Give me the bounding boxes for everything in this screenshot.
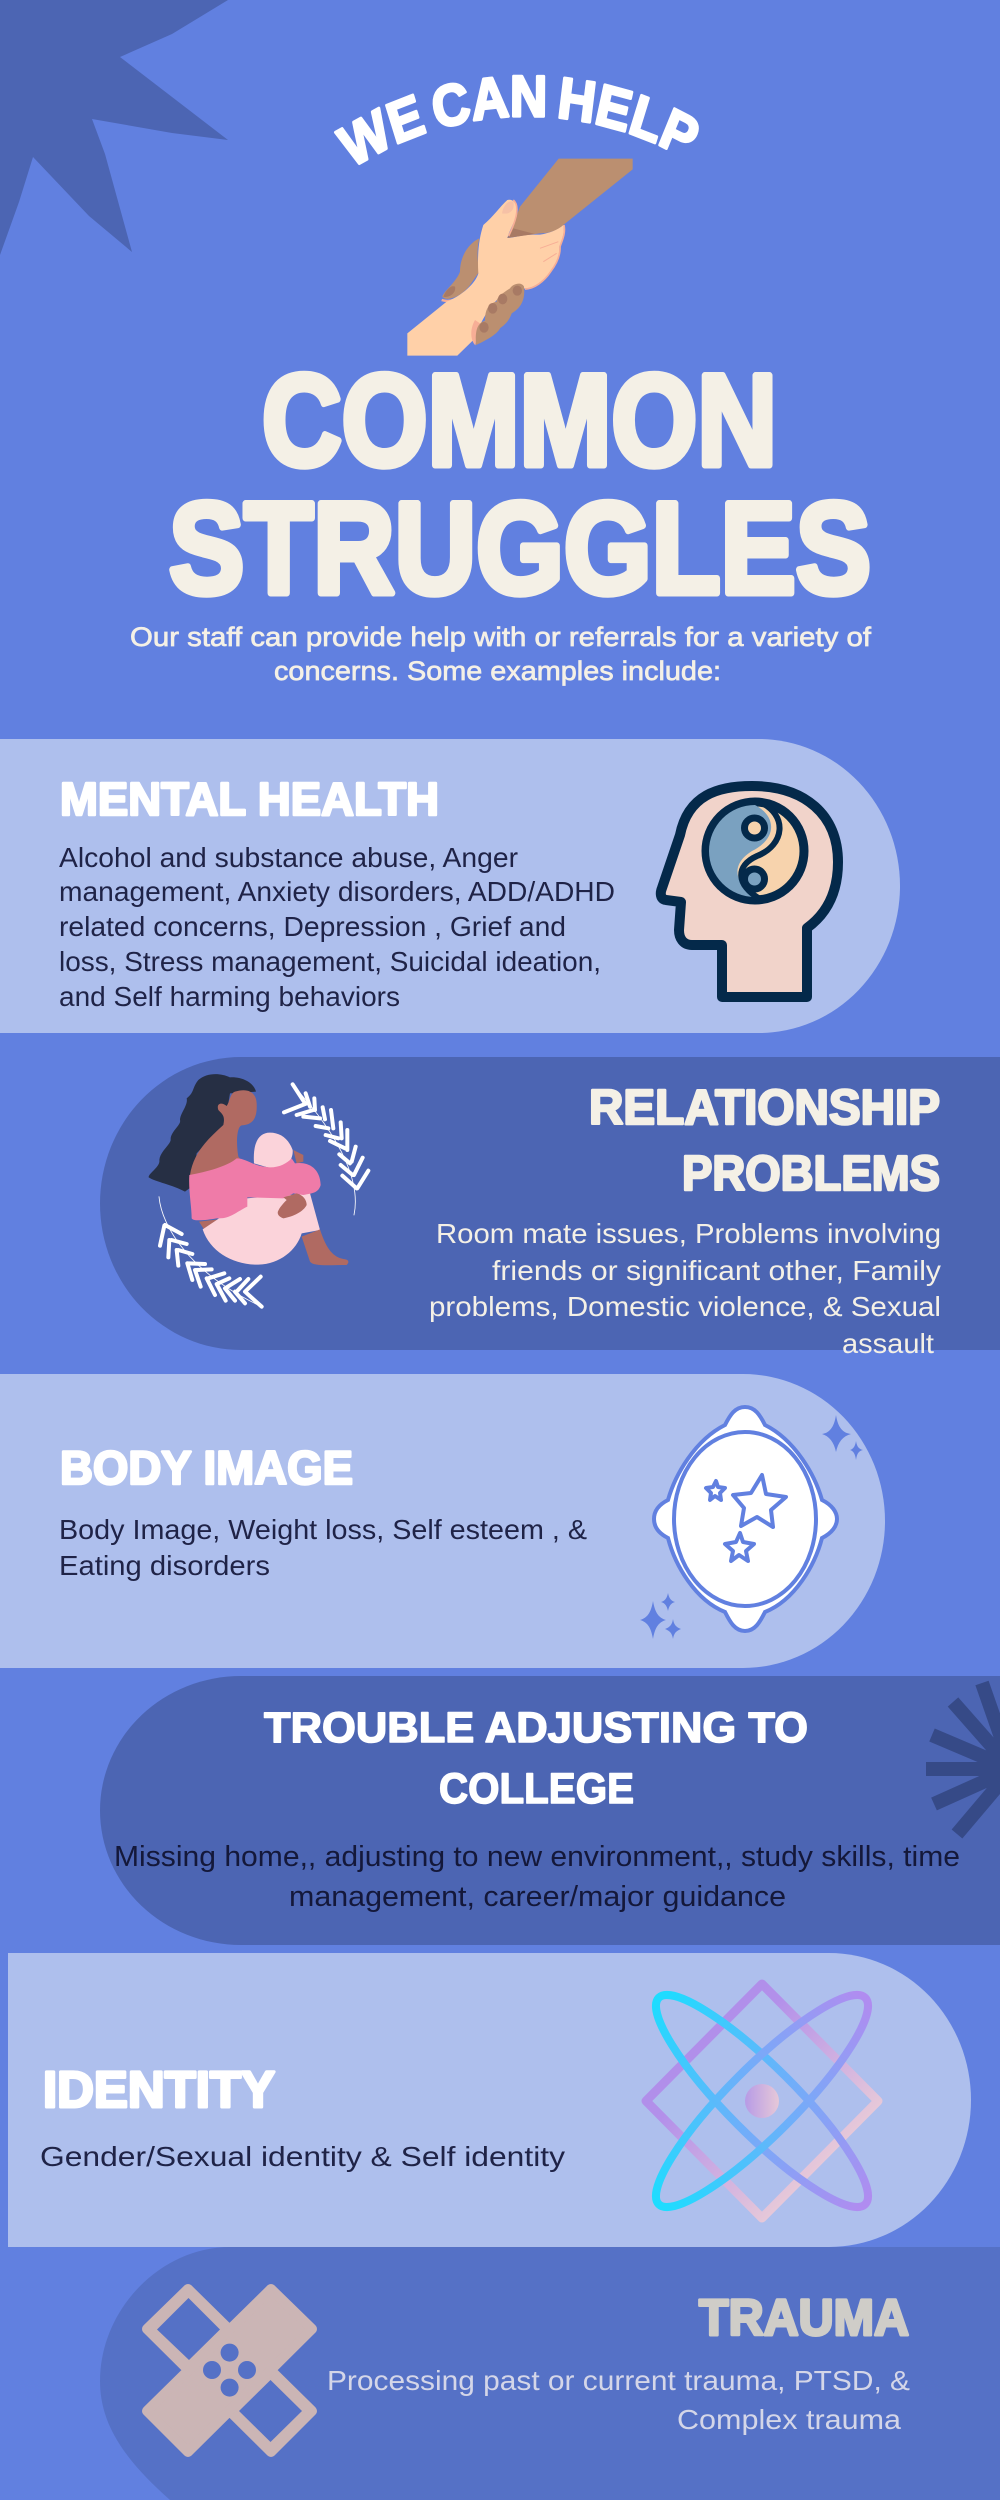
- heading: relationship problems: PROBLEMS: [682, 1147, 940, 1201]
- text: mental health list: and Self harming behaviors: [59, 981, 400, 1012]
- text: relationship list: problems, Domestic violence, & Sexual: [429, 1291, 941, 1322]
- heading: body image: BODY IMAGE: [60, 1441, 353, 1494]
- text: body image list: [59, 1514, 587, 1581]
- illustration: seated woman with leaves: [149, 1074, 368, 1307]
- icon: helping hands: [407, 159, 633, 356]
- icon: radiating burst: [926, 1683, 1000, 1834]
- panel: trauma: [100, 2247, 1000, 2500]
- title: common struggles: [169, 347, 871, 621]
- text: body image list: Body Image, Weight loss, Self esteem , &: [59, 1514, 587, 1545]
- text: adjusting list: Missing home,, adjusting to new environment,, study skills, time: [114, 1841, 960, 1873]
- icon: atom with diamond: [635, 1974, 889, 2228]
- icon: head with yin-yang: [661, 786, 838, 997]
- icon: mirror with stars: [640, 1407, 863, 1639]
- icon: corner starburst: [0, 0, 228, 255]
- heading: relationship problems: RELATIONSHIP: [589, 1081, 940, 1135]
- text: mental health list: Alcohol and substance abuse, Anger: [59, 842, 518, 873]
- icon: bandage: [147, 2289, 312, 2452]
- text: adjusting list: [114, 1841, 960, 1913]
- title: common struggles: COMMON: [262, 347, 777, 493]
- text: trauma list: [327, 2365, 910, 2435]
- text: identity list: Gender/Sexual identity & Self identity: [40, 2141, 565, 2172]
- heading: mental health: MENTAL HEALTH: [60, 773, 439, 825]
- intro text: [130, 622, 872, 686]
- text: trauma list: Complex trauma: [677, 2404, 901, 2435]
- heading: trouble adjusting to college: TROUBLE ADJUSTING TO: [264, 1704, 808, 1752]
- heading: identity: IDENTITY: [43, 2061, 275, 2118]
- intro text: concerns. Some examples include:: [274, 656, 721, 686]
- intro text: Our staff can provide help with or referrals for a variety of: [130, 622, 872, 652]
- text: mental health list: loss, Stress management, Suicidal ideation,: [59, 946, 601, 977]
- panel: body image: [0, 1374, 885, 1668]
- panel: trouble adjusting to college: [100, 1676, 1000, 1945]
- heading: trouble adjusting to college: COLLEGE: [439, 1765, 634, 1813]
- text: adjusting list: management, career/major guidance: [289, 1881, 786, 1913]
- text: relationship list: [429, 1218, 941, 1359]
- panel: mental health: [0, 739, 900, 1033]
- title: common struggles: STRUGGLES: [169, 475, 871, 621]
- panel: identity: [8, 1953, 971, 2247]
- heading: trouble adjusting to college: [264, 1704, 808, 1813]
- panel: relationship problems: [100, 1057, 1000, 1359]
- text: relationship list: assault: [842, 1328, 934, 1359]
- heading: trauma: TRAUMA: [699, 2289, 909, 2346]
- text: body image list: Eating disorders: [59, 1550, 270, 1581]
- text: trauma list: Processing past or current trauma, PTSD, &: [327, 2365, 910, 2396]
- text: mental health list: management, Anxiety disorders, ADD/ADHD: [59, 876, 615, 907]
- text: mental health list: [59, 842, 615, 1012]
- text: relationship list: Room mate issues, Problems involving: [436, 1218, 941, 1249]
- heading: relationship problems: [589, 1081, 940, 1201]
- curved heading: we can help: WE CAN HELP: [334, 74, 699, 166]
- text: relationship list: friends or significant other, Family: [492, 1255, 941, 1286]
- text: mental health list: related concerns, Depression , Grief and: [59, 911, 566, 942]
